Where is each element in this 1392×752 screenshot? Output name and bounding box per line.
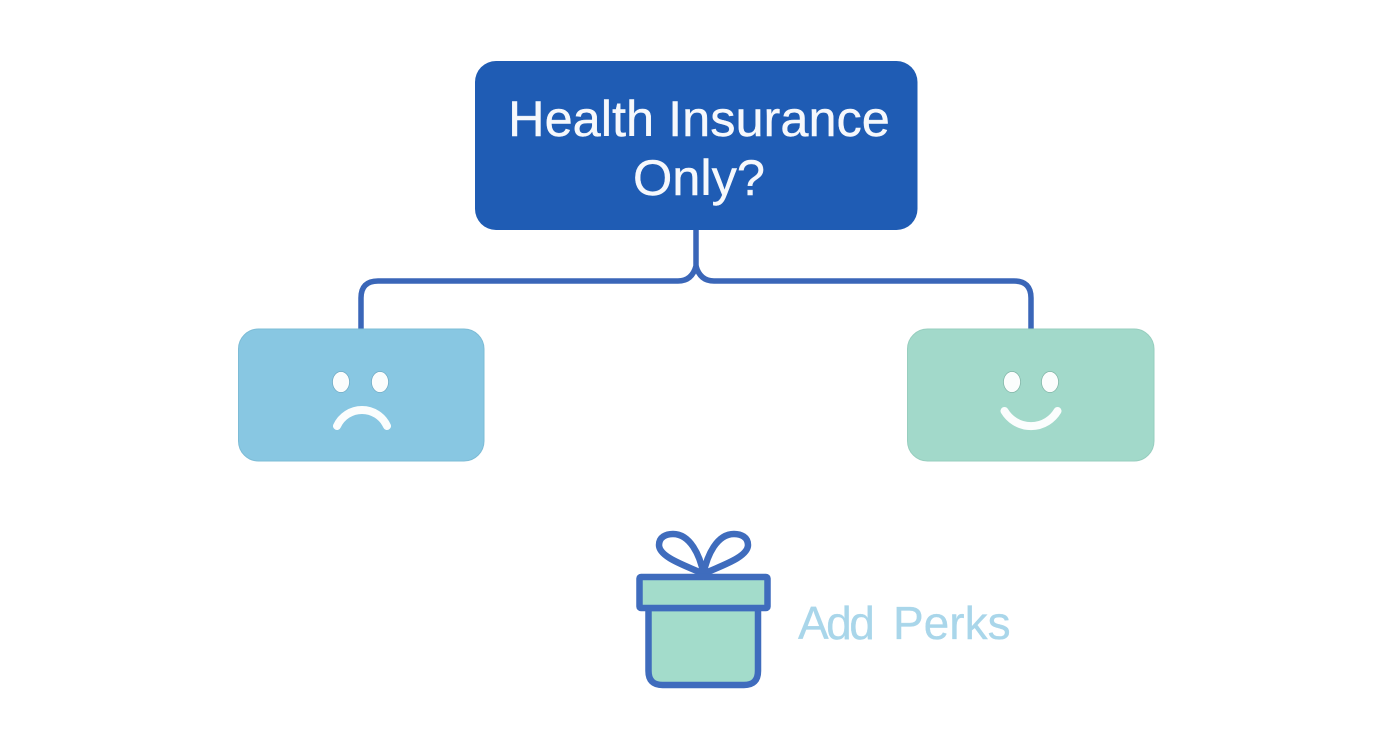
icon: sad face [332, 372, 388, 426]
label: add perks: Add [798, 597, 872, 649]
icon: happy face [1004, 372, 1058, 426]
question text: Health Insurance [508, 90, 890, 147]
panel: happy outcome [908, 329, 1154, 461]
connector lines [361, 228, 1031, 330]
question text: Only? [633, 149, 765, 206]
panel: sad outcome [238, 329, 484, 461]
icon: gift box [640, 534, 768, 685]
question box [475, 61, 918, 230]
label: add perks: Perks [893, 597, 1011, 649]
